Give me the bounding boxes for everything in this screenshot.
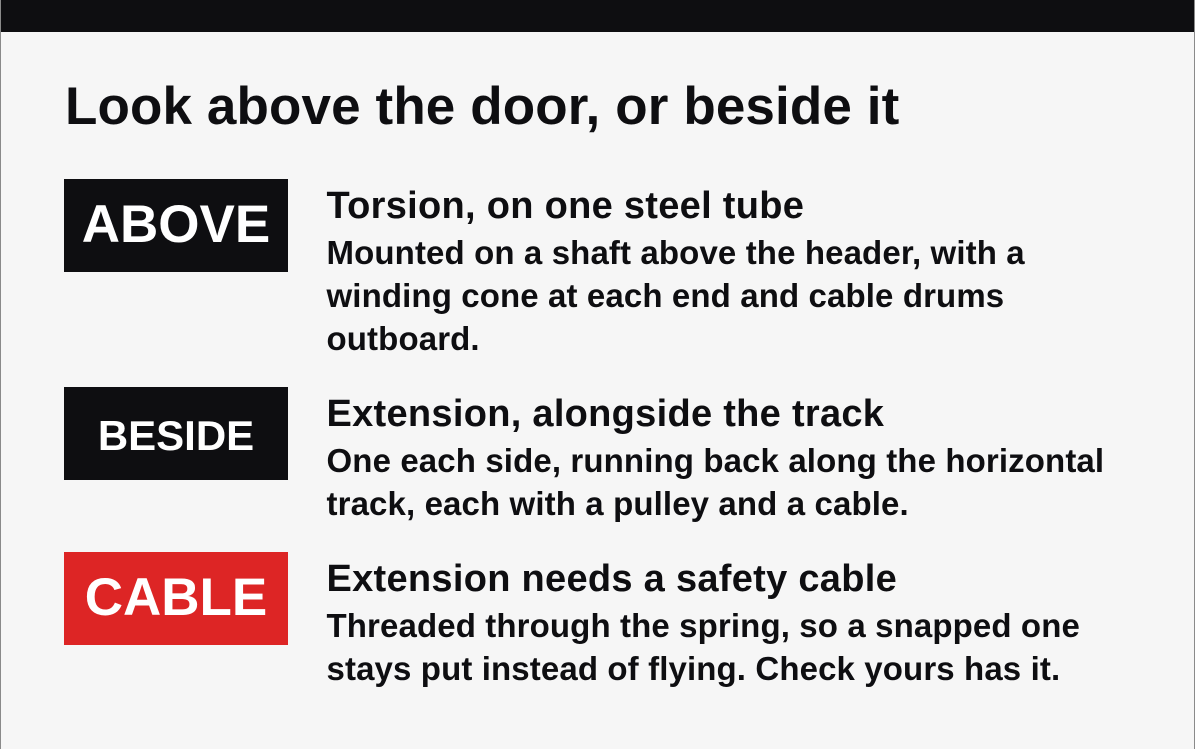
text: safety cable description: stays put instead of flying. Check yours has it. (326, 650, 1060, 687)
text: extension description: track, each with a pulley and a cable. (326, 485, 909, 522)
text: safety cable description: Threaded through the spring, so a snapped one (326, 607, 1080, 644)
right edge line (1194, 0, 1195, 749)
text: torsion description (326, 234, 1025, 356)
top bar (0, 0, 1195, 32)
heading: extension: Extension, alongside the track (326, 392, 884, 434)
text: torsion description: Mounted on a shaft above the header, with a (326, 234, 1025, 270)
text: torsion description: winding cone at each end and cable drums (326, 276, 1004, 314)
text: safety cable description (326, 607, 1080, 687)
heading: safety cable: Extension needs a safety cable (326, 558, 897, 600)
badge: above (64, 179, 288, 272)
text: extension description (326, 442, 1104, 522)
badge: above: ABOVE (82, 195, 270, 254)
text: torsion description: outboard. (326, 320, 480, 356)
badge: beside: BESIDE (98, 412, 254, 458)
text: extension description: One each side, running back along the horizontal (326, 442, 1104, 479)
badge: cable (64, 552, 288, 645)
badge: beside (64, 387, 288, 480)
heading: torsion: Torsion, on one steel tube (326, 184, 804, 226)
title: Look above the door, or beside it (65, 77, 899, 136)
badge: cable: CABLE (85, 568, 267, 626)
left edge line (0, 0, 1, 749)
